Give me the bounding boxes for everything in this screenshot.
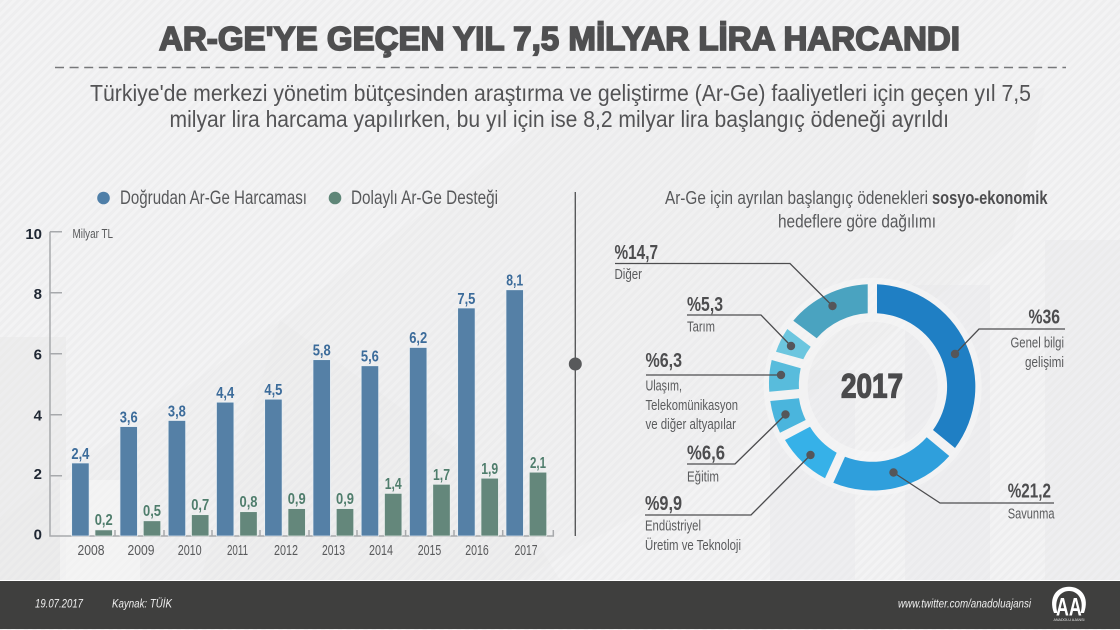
legend: Dolaylı Ar-Ge Desteği [351,188,498,209]
label: Genel bilgi: Genel bilgi [1010,336,1064,352]
direct spending values: 6,2 [409,330,427,347]
direct spending values: 5,6 [361,348,379,366]
label: Endüstriyel: Endüstriyel [645,519,701,535]
label: Genel bilgi: %36 [1028,306,1060,328]
y axis: 8 [34,286,42,303]
year labels [78,543,538,559]
label: Endüstriyel: %9,9 [645,493,682,515]
label: Ulaşım: Telekomünikasyon [646,398,738,414]
indirect support values: 0,9 [336,491,354,508]
legend: Doğrudan Ar-Ge Harcaması [120,188,307,209]
y axis: 6 [34,346,42,364]
y axis [25,226,553,544]
direct spending bars [72,290,523,536]
donut heading: sosyo-ekonomik [932,187,1048,208]
indirect support values: 0,8 [240,494,258,511]
year labels: 2010 [178,543,202,559]
label: Savunma: %21,2 [1008,480,1051,502]
donut heading [665,187,1048,232]
donut heading: hedeflere göre dağılımı [778,210,936,232]
segment: Ulaşım [769,360,801,392]
donut chart [769,284,975,491]
center year: 2017 [841,367,903,405]
icon: AA logo: ANADOLU AJANSI [1054,618,1085,622]
footer bar [0,580,1120,629]
year labels: 2017 [514,543,538,559]
subtitle [90,80,1031,132]
twitter address: www.twitter.com/anadoluajansi [898,598,1031,610]
indirect support values: 0,5 [143,503,161,520]
icon: AA logo: AA [1056,594,1082,622]
direct spending values: 3,6 [120,410,138,426]
year labels: 2012 [274,543,298,559]
donut heading: Ar-Ge için ayrılan başlangıç ödenekleri [665,187,928,208]
year labels: 2014 [369,543,393,559]
direct spending values: 7,5 [457,291,475,308]
indirect support values: 1,7 [433,467,450,484]
y axis: 0 [34,526,42,544]
title: AR-GE'YE GEÇEN YIL 7,5 MİLYAR LİRA HARCANDI [159,20,960,57]
segment: Genel bilgi gelişimi [877,284,975,448]
indirect support values: 0,2 [95,512,113,529]
label: Ulaşım: Ulaşım, [646,379,682,395]
year labels: 2016 [465,543,489,559]
direct spending values: 8,1 [506,272,523,290]
segment: Diğer [793,284,868,338]
direct spending values: 4,5 [264,382,282,399]
year labels: 2013 [322,543,345,559]
label: Savunma [1008,480,1055,522]
label: Genel bilgi [1010,306,1064,371]
leader lines [615,264,1065,515]
label: Genel bilgi: gelişimi [1025,355,1064,371]
label: Diğer: %14,7 [614,242,658,264]
segment: Savunma [833,437,949,491]
source: Kaynak: TÜİK [112,598,173,610]
indirect support values: 2,1 [530,455,546,472]
year labels: 2009 [128,543,154,559]
segment: Eğitim [770,398,806,433]
label: Eğitim: Eğitim [687,470,719,486]
year labels: 2011 [227,543,248,559]
subtitle: Türkiye'de merkezi yönetim bütçesinden araştırma ve geliştirme (Ar-Ge) faaliyetleri için geçen yıl 7,5 [90,80,1031,106]
year labels: 2008 [78,543,104,559]
icon: AA logo [1052,587,1086,622]
indirect support values: 1,4 [385,476,402,493]
year labels: 2015 [418,543,441,559]
date: 19.07.2017 [35,598,83,610]
label: Diğer [614,242,658,283]
label: Tarım: Tarım [687,320,715,336]
direct spending values: 5,8 [313,342,331,360]
label: Savunma: Savunma [1008,506,1055,522]
indirect support bars [95,472,547,536]
indirect support values: 0,7 [191,497,209,514]
segment: Endüstriyel [785,427,837,478]
direct spending values: 4,4 [216,385,234,402]
direct spending values: 2,4 [71,446,89,463]
y axis: 2 [34,466,42,483]
label: Ulaşım: %6,3 [646,350,682,372]
indirect support values: 1,9 [481,461,498,478]
label: Tarım [687,294,723,336]
label: Eğitim: %6,6 [687,442,725,464]
indirect support values [95,455,546,529]
label: Ulaşım: ve diğer altyapılar [646,417,736,433]
label: Diğer: Diğer [614,267,642,283]
y axis: 10 [25,226,42,243]
label: Endüstriyel: Üretim ve Teknoloji [645,536,741,554]
divider [569,192,582,536]
indirect support values: 0,9 [288,491,306,508]
label: Tarım: %5,3 [687,294,723,316]
label: Endüstriyel [645,493,741,554]
y axis: Milyar TL [72,227,113,241]
label: Eğitim [687,442,725,486]
bar chart [25,226,553,559]
legend [97,188,498,209]
direct spending values: 3,8 [168,404,186,420]
segment: Tarım [776,329,811,359]
y axis: 4 [34,408,43,424]
direct spending values [71,272,523,463]
subtitle: milyar lira harcama yapılırken, bu yıl için ise 8,2 milyar lira başlangıç ödeneği ayrıldı [170,106,949,132]
label: Ulaşım [646,350,738,433]
